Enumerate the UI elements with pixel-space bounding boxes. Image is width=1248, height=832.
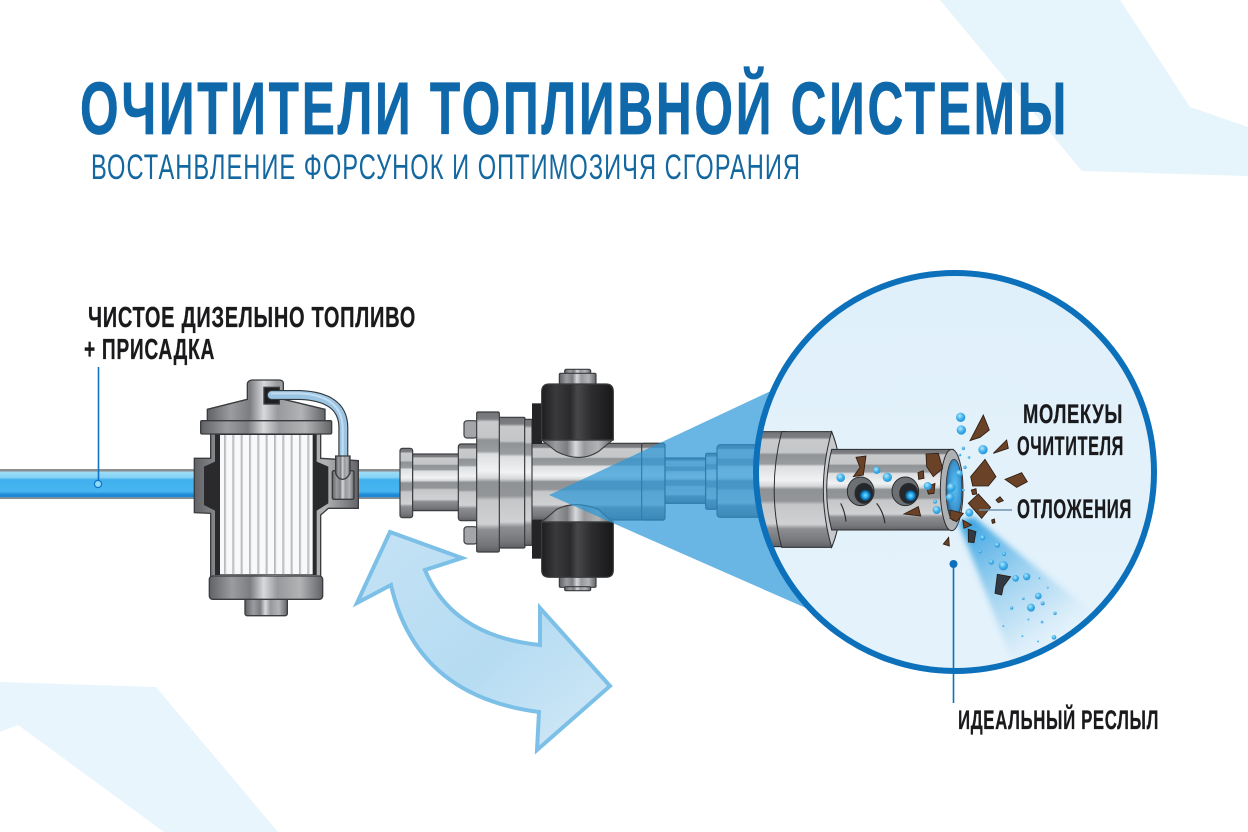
outlet ring	[706, 453, 717, 509]
filter pleats	[220, 435, 313, 574]
label: clean diesel fuel plus additive: + ПРИСАДКА	[84, 334, 215, 366]
outlet collar	[642, 443, 665, 520]
deposits	[853, 415, 1027, 595]
label: cleaner molecules: МОЛЕКУЫ	[1023, 399, 1123, 429]
cleaner molecules	[836, 413, 1057, 642]
label: cleaner molecules: ОЧИТИТЕЛЯ	[1017, 431, 1124, 461]
inlet collar	[400, 448, 413, 518]
filter black inner	[204, 434, 328, 575]
label: cleaner molecules	[1017, 399, 1124, 461]
large cylinder	[774, 432, 842, 547]
label: clean diesel fuel plus additive: ЧИСТОЕ ДИЗЕЛЫНО ТОПЛИВО	[88, 302, 416, 334]
inlet sleeve	[413, 454, 459, 511]
black backing block	[532, 403, 542, 559]
nozzle tip	[940, 449, 963, 531]
bottom cap	[559, 577, 596, 591]
cylinder shoulder	[822, 430, 838, 549]
fuel pipe	[0, 469, 401, 499]
injector assembly	[400, 369, 770, 591]
filter lid	[207, 380, 325, 421]
flange bolts	[464, 421, 477, 544]
top roller metal	[542, 440, 613, 457]
thin ring	[525, 419, 532, 545]
top roller	[542, 384, 613, 440]
circle border	[756, 273, 1154, 671]
main body	[532, 443, 663, 520]
subtitle: ВОСТАНВЛЕНИЕ ФОРСУНОК И ОПТИМОЗИЧЯ СГОРАНИЯ	[91, 148, 801, 187]
magnifier circle	[743, 273, 1154, 673]
large flange	[477, 412, 499, 552]
filter housing with side ports	[194, 434, 358, 577]
filter unit	[194, 380, 358, 616]
cycle arrow	[357, 532, 610, 750]
fuel port	[264, 387, 279, 404]
background shape: bottom left	[0, 682, 278, 832]
magnification cone	[549, 382, 830, 612]
nozzle close-up	[743, 413, 1093, 673]
hole two	[892, 477, 919, 506]
background shape: top right	[940, 0, 1248, 176]
outlet pipe	[665, 458, 706, 503]
top cap	[559, 369, 596, 384]
spray cone	[955, 513, 1079, 653]
hole one	[847, 477, 874, 506]
filter foot	[245, 597, 287, 616]
outlet body	[717, 445, 770, 517]
label: ideal result with leader	[950, 560, 1159, 735]
additive tube	[272, 393, 343, 457]
filter bottom cap	[209, 576, 323, 599]
bottom roller metal	[542, 505, 613, 522]
leader line: fuel label	[94, 367, 102, 488]
filter rim	[201, 421, 332, 434]
mid cylinder	[498, 417, 525, 548]
label: clean diesel fuel plus additive	[84, 302, 416, 366]
injector barrel	[759, 431, 788, 548]
nozzle tube	[827, 449, 953, 530]
slots	[841, 503, 885, 523]
tube connector	[332, 456, 354, 499]
bottom roller	[542, 522, 613, 577]
small flange	[458, 444, 478, 521]
label: deposits with leader: ОТЛОЖЕНИЯ	[1017, 494, 1132, 524]
